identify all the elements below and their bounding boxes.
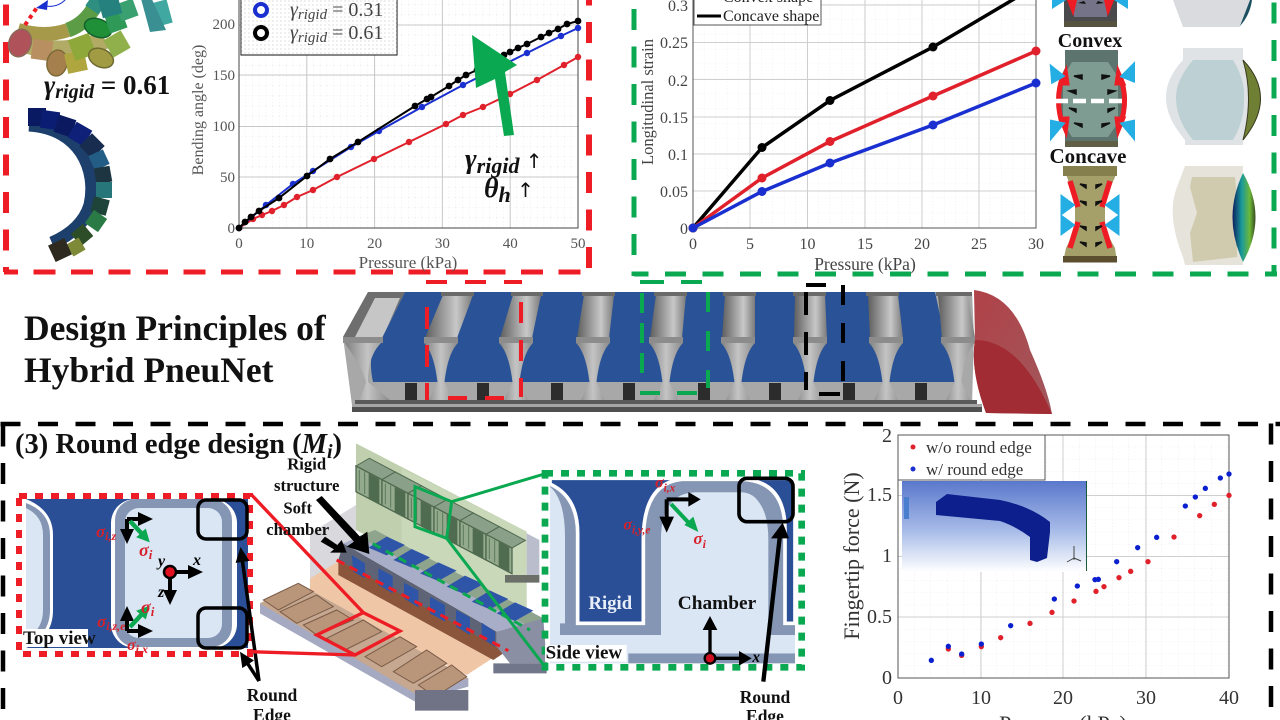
x tick labels xyxy=(689,236,1044,253)
y tick labels: 0.1 xyxy=(668,147,688,164)
diagram: top view xyxy=(19,496,250,656)
leader arrow xyxy=(763,523,789,682)
x tick labels: 40 xyxy=(503,236,518,252)
y tick labels: 0 xyxy=(680,221,688,238)
x axis title: Pressure (kPa) xyxy=(359,253,457,272)
light chamber re-cut xyxy=(550,492,795,653)
label: round edge left: Round xyxy=(247,685,298,705)
label: gamma rigid 0.61: = 0.61 xyxy=(94,70,170,100)
grey plane xyxy=(310,505,356,587)
stress arrows lower: i,z,e xyxy=(106,619,126,633)
icon: concave chamber section xyxy=(1062,166,1118,262)
y tick labels xyxy=(660,0,688,238)
x tick labels: 10 xyxy=(800,236,816,253)
annotation: gamma rigid up: γ xyxy=(465,144,477,175)
annotation: theta h up: h xyxy=(499,182,511,207)
stress arrows upper: σ xyxy=(96,522,105,541)
icon: concave chamber FEM view xyxy=(1173,166,1256,265)
round edge highlight boxes xyxy=(198,500,247,648)
x tick labels: 20 xyxy=(914,236,930,253)
icon: FEM bent finger coloured xyxy=(5,0,173,78)
legend: w/ round edge xyxy=(926,460,1023,479)
coordinate axes: z xyxy=(157,584,165,601)
diagram: isometric assembly xyxy=(250,443,547,711)
x tick labels: 30 xyxy=(1136,687,1156,709)
x tick labels: 5 xyxy=(746,236,754,253)
icon: convex chamber FEM view xyxy=(1166,48,1260,145)
figure: hybrid PneuNet body xyxy=(343,282,1052,414)
stress arrows: σ xyxy=(623,516,632,533)
green plane xyxy=(356,443,527,622)
icon: FEM bent finger navy xyxy=(28,108,112,262)
highlight box xyxy=(739,478,793,522)
series: flat blue xyxy=(693,83,1036,228)
legend: w/o round edge xyxy=(926,438,1032,457)
y tick labels: 0 xyxy=(882,667,892,689)
chart: bending angle vs pressure xyxy=(190,0,586,272)
series: gamma 0.31 red xyxy=(239,57,578,228)
diagram: side view xyxy=(545,473,802,682)
y axis title: Longitudinal strain xyxy=(638,39,657,165)
y tick labels: 0.15 xyxy=(660,110,688,127)
y tick labels: 0.25 xyxy=(660,35,688,52)
dashed section lines xyxy=(360,537,530,630)
y tick labels xyxy=(212,17,235,237)
series: gamma 0.61 black xyxy=(239,21,578,228)
y tick labels: 0.5 xyxy=(867,606,892,628)
legend: rigid xyxy=(298,7,328,23)
labels: Rigid xyxy=(287,454,327,473)
series: scatter with round edge xyxy=(929,471,1232,663)
chart: longitudinal strain vs pressure xyxy=(638,0,1044,274)
y tick labels: 0.2 xyxy=(668,73,688,90)
orange plane xyxy=(310,562,495,675)
y tick labels: 150 xyxy=(212,68,235,84)
x tick labels xyxy=(893,687,1239,709)
x tick labels: 20 xyxy=(367,236,382,252)
panel: bending angle (red dashed) xyxy=(4,0,590,272)
icon: flat chamber FEM view xyxy=(1173,0,1252,27)
label: round edge right: Round xyxy=(740,687,791,707)
stress arrows upper: i xyxy=(149,547,153,562)
dashed callout: black xyxy=(806,285,843,394)
x tick labels: 0 xyxy=(689,236,697,253)
heading: i xyxy=(327,441,333,463)
red zoom guides xyxy=(250,495,400,655)
x tick labels: 25 xyxy=(971,236,987,253)
legend: rigid xyxy=(298,30,328,46)
stress arrows: i,x xyxy=(664,482,676,494)
annotation: gamma rigid up: ↑ xyxy=(519,149,543,173)
label: side view: Side view xyxy=(546,643,622,664)
stress arrows: i,y,e xyxy=(632,524,650,536)
x tick labels: 10 xyxy=(971,687,991,709)
dotted outline xyxy=(545,473,802,667)
labels: chamber xyxy=(266,520,330,539)
labels xyxy=(266,454,339,539)
hourglass ribs xyxy=(345,343,975,400)
arrow: green increase xyxy=(472,35,517,136)
stress arrows xyxy=(623,474,707,551)
x tick labels: 40 xyxy=(1219,687,1239,709)
stress arrows: σ xyxy=(693,529,703,548)
dashed callout: red xyxy=(426,282,522,400)
stress arrows lower: σ xyxy=(141,597,151,617)
stress arrows upper: σ xyxy=(139,540,149,560)
legend: Concave shape xyxy=(723,8,819,25)
title: Hybrid PneuNet xyxy=(24,350,274,390)
x tick labels: 20 xyxy=(1053,687,1073,709)
dotted outline xyxy=(19,496,250,654)
label: Convex: Convex xyxy=(1058,30,1122,52)
label: chamber: Chamber xyxy=(678,593,757,614)
annotation: gamma rigid up: rigid xyxy=(477,153,520,178)
stress arrows lower: σ xyxy=(97,612,106,631)
y tick labels: 1.5 xyxy=(867,484,892,506)
series: convex red xyxy=(693,51,1036,228)
y axis title: Fingertip force (N) xyxy=(839,472,864,640)
y tick labels: 50 xyxy=(220,170,235,186)
upper pillars xyxy=(343,292,975,343)
y tick labels xyxy=(867,425,892,689)
y tick labels: 200 xyxy=(212,17,235,33)
series: gamma 0.31 blue xyxy=(239,28,578,228)
heading: (3) Round edge design (M xyxy=(15,429,327,460)
coordinate axes xyxy=(156,552,201,601)
label: Concave: Concave xyxy=(1050,144,1126,168)
lower plate with chambers xyxy=(260,583,468,711)
labels: structure xyxy=(274,476,339,495)
grey bands xyxy=(550,478,795,663)
rigid structure frames xyxy=(356,458,539,583)
annotation: theta h up: ↑ xyxy=(511,178,534,202)
dashed callout: green xyxy=(640,282,708,393)
legend: γ xyxy=(290,22,299,44)
heading: ) xyxy=(333,429,342,460)
icon: convex chamber section xyxy=(1052,50,1133,147)
labels: Soft xyxy=(283,498,312,517)
y tick labels: 1 xyxy=(882,545,892,567)
icon: flat chamber section xyxy=(1052,0,1128,27)
label: gamma rigid 0.61: γ xyxy=(44,70,56,100)
x tick labels: 0 xyxy=(235,236,243,252)
stress arrows lower: i xyxy=(151,604,155,619)
red end cap xyxy=(974,290,1052,414)
coordinate axes: y xyxy=(156,553,166,570)
stress arrows upper xyxy=(96,519,153,562)
panel: round edge design (black dashed) xyxy=(0,424,1280,720)
soft chamber row xyxy=(338,530,547,673)
coordinate axes xyxy=(703,616,760,666)
coordinate axes: x xyxy=(192,552,201,569)
rigid blue xyxy=(550,478,795,623)
legend: = 0.61 xyxy=(327,22,383,44)
stress arrows lower xyxy=(97,597,155,656)
x axis title: Pressure (kPa) xyxy=(814,254,916,274)
black leader arrows xyxy=(316,496,369,554)
series: concave black xyxy=(693,0,1036,228)
annotation: theta h up: θ xyxy=(484,173,499,204)
label: rigid: Rigid xyxy=(589,593,633,614)
series: scatter without round edge xyxy=(946,493,1232,658)
stress arrows lower: i,x xyxy=(136,642,148,656)
x tick labels: 30 xyxy=(1028,236,1044,253)
panel: longitudinal strain (green dashed) xyxy=(634,0,1277,276)
stress arrows lower: σ xyxy=(127,637,136,654)
base blocks xyxy=(405,383,927,400)
label: top view: Top view xyxy=(23,628,96,649)
legend xyxy=(898,435,1045,480)
x tick labels: 15 xyxy=(857,236,873,253)
green zoom guides xyxy=(415,473,547,667)
x tick labels: 30 xyxy=(435,236,450,252)
x tick labels: 10 xyxy=(299,236,314,252)
legend xyxy=(694,0,821,25)
label: gamma rigid 0.61: rigid xyxy=(55,81,95,103)
y tick labels: 100 xyxy=(212,119,235,135)
x tick labels: 0 xyxy=(893,687,903,709)
stress arrows: σ xyxy=(655,474,664,491)
title: Design Principles of xyxy=(24,308,327,348)
y tick labels: 2 xyxy=(882,425,892,447)
stress arrows upper: i,z xyxy=(105,529,117,543)
x tick labels xyxy=(235,236,586,252)
legend xyxy=(241,0,397,55)
arrows: round edge leaders left xyxy=(242,558,259,681)
inset FEM xyxy=(902,481,1087,572)
coordinate axes: x xyxy=(751,649,760,666)
y tick labels: 0.05 xyxy=(660,184,688,201)
x tick labels: 50 xyxy=(570,236,586,252)
chart: fingertip force vs pressure xyxy=(839,425,1239,720)
y tick labels: 0 xyxy=(228,221,235,237)
stress arrows: i xyxy=(703,537,707,551)
y axis title: Bending angle (deg) xyxy=(190,45,207,175)
